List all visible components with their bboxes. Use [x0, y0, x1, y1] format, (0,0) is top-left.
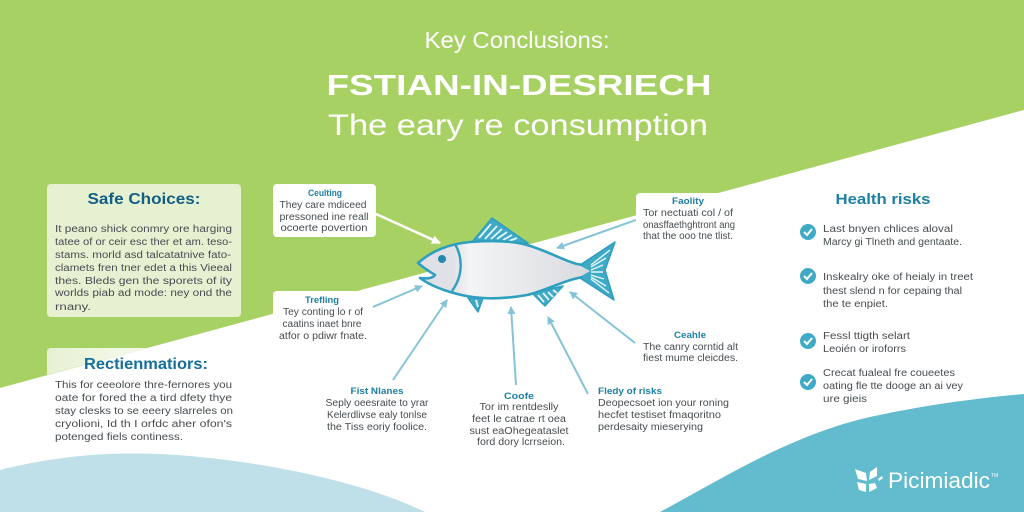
callout: trefling — [273, 291, 373, 342]
callout: cooke: sust eaOhegeataslet — [470, 426, 569, 437]
panel: safe choices: Safe Choices: — [88, 191, 200, 208]
arrow: ceahle to fish — [570, 292, 635, 343]
callout: faolity: Tor nectuati col / of — [643, 208, 733, 219]
callout: ceahle: The canry corntid alt — [643, 342, 738, 353]
callout: first names: Kelerdlivse ealy tonlse — [327, 410, 427, 421]
health item 4: oating fle tte dooge an ai vey — [823, 381, 963, 392]
callout: ceahle: fiest mume cleicdes. — [643, 353, 738, 364]
body fill — [418, 241, 590, 298]
panel: safe choices: tatee of or ceir esc ther et am. teso- — [55, 237, 232, 248]
title block: Key Conclusions: — [424, 27, 610, 53]
panel: recommendations: Rectienmatiors: — [84, 356, 208, 373]
panel: recommendations: This for ceeolore thre-fernores you — [55, 380, 232, 391]
panel: safe choices — [47, 184, 241, 317]
callout: coating: ocoerte povertion — [280, 223, 368, 234]
arrow: fledy of risks to fish — [548, 317, 588, 394]
health item 4: ure gieis — [823, 394, 867, 405]
callout: ceahle: Ceahle — [674, 330, 706, 341]
health item 2: Inskealry oke of heialy in treet — [823, 272, 973, 283]
arrow: first names to fish — [393, 300, 447, 380]
tail — [580, 242, 615, 300]
callout: cooke: feet le catrae rt oea — [472, 414, 566, 425]
health item 3: Fessl ttigth selart — [823, 331, 910, 342]
title block: The eary re consumption — [328, 109, 708, 142]
body outline — [418, 241, 583, 298]
eye — [438, 255, 446, 263]
anal fin — [532, 286, 563, 306]
arrow: coating to fish — [376, 214, 440, 243]
callout: first names: Fist Nlanes — [350, 386, 404, 397]
logo — [855, 467, 998, 493]
panel: safe choices: thes. Bleds gen the sporets of ity — [55, 276, 232, 287]
health item 1 — [800, 224, 962, 248]
health item 2: thest slend n for cepaing thal — [823, 286, 962, 297]
background: green diagonal area — [0, 0, 1024, 388]
background: pale blue wave — [0, 454, 425, 512]
health item 3 — [800, 331, 910, 355]
panel: recommendations: potenged fiels continess. — [55, 432, 183, 443]
arrow: trefling to fish — [373, 286, 422, 307]
panel: safe choices: It peano shick conmry ore harging — [55, 224, 232, 235]
heading: health risks: Health risks — [836, 191, 930, 208]
callout: coating: Ceulting — [308, 188, 342, 199]
panel: recommendations — [47, 348, 233, 443]
gill — [452, 244, 461, 291]
arrow: faolity to fish — [557, 220, 636, 248]
callout: fledy of risks: perdesaity mieserying — [598, 422, 703, 433]
callout: coating: They care mdiceed — [280, 200, 366, 211]
callout: coating: pressoned ine reall — [280, 212, 368, 223]
callout: cooke — [470, 391, 569, 448]
callout: cooke: Tor im rentdeslly — [480, 402, 558, 413]
callout: first names: the Tiss eoriy foolice. — [327, 422, 427, 433]
health item 1: Marcy gi Tlneth and gentaate. — [823, 237, 962, 248]
callout: first names — [326, 386, 429, 433]
callout: fledy of risks: hecfet testiset fmaqoritno — [598, 410, 721, 421]
callout: trefling: Tey conting lo r of — [283, 307, 363, 318]
panel: health risks — [800, 191, 973, 405]
health item 2: the te enpiet. — [823, 299, 888, 310]
panel: recommendations: cryolioni, Id th I orfdc aher ofon's — [55, 419, 232, 430]
icon: fish illustration — [418, 218, 615, 312]
callout: fledy of risks — [598, 386, 729, 433]
panel: recommendations: oate for fored the a tird dfety thye — [55, 393, 233, 404]
health item 1: Last bnyen chlices aloval — [823, 224, 953, 235]
panel: safe choices: stams. morld asd talcatatnive fato- — [55, 250, 231, 261]
callout: trefling: caatins inaet bnre — [282, 319, 362, 330]
logo: Picimiadic — [888, 468, 990, 493]
callout: faolity — [636, 186, 754, 243]
callout: faolity: onasffaethghtront ang — [643, 220, 735, 231]
callout: cooke: Coofe — [504, 391, 534, 402]
panel: recommendations: stay clesks to se eeery slarreles on — [55, 406, 233, 417]
panel: safe choices: clamets fren tner edet a this Vieeal — [55, 263, 232, 274]
callout: ceahle — [643, 330, 738, 364]
callout: first names: Seply oeesraite to yrar — [326, 398, 429, 409]
arrow: cooke to fish — [511, 307, 516, 385]
callout: trefling: Trefling — [305, 295, 339, 306]
callout: coating — [273, 184, 376, 237]
callout: fledy of risks: Fledy of risks — [598, 386, 662, 397]
callout: fledy of risks: Deopecsoet ion your roning — [598, 398, 729, 409]
health item 4 — [800, 368, 963, 405]
panel: safe choices: rnany. — [55, 302, 91, 313]
callout: faolity: that the ooo tne tlist. — [643, 231, 733, 242]
health item 4: Crecat fualeal fre coueetes — [823, 368, 955, 379]
callout: trefling: atfor o pdiwr fnate. — [279, 331, 367, 342]
panel: safe choices: worlds piab ad mode: ney ond the — [54, 288, 233, 299]
title block: FSTIAN-IN-DESRIECH — [326, 70, 712, 102]
title block — [326, 27, 712, 142]
dorsal fin — [472, 218, 528, 243]
health item 3: Leoién or iroforrs — [823, 344, 906, 355]
logo: TM — [991, 473, 998, 479]
callout: cooke: ford dory lcrrseion. — [477, 437, 565, 448]
pelvic fin — [468, 298, 483, 312]
health item 2 — [800, 268, 973, 310]
background: teal wave — [660, 394, 1024, 512]
callout: faolity: Faolity — [672, 196, 705, 207]
